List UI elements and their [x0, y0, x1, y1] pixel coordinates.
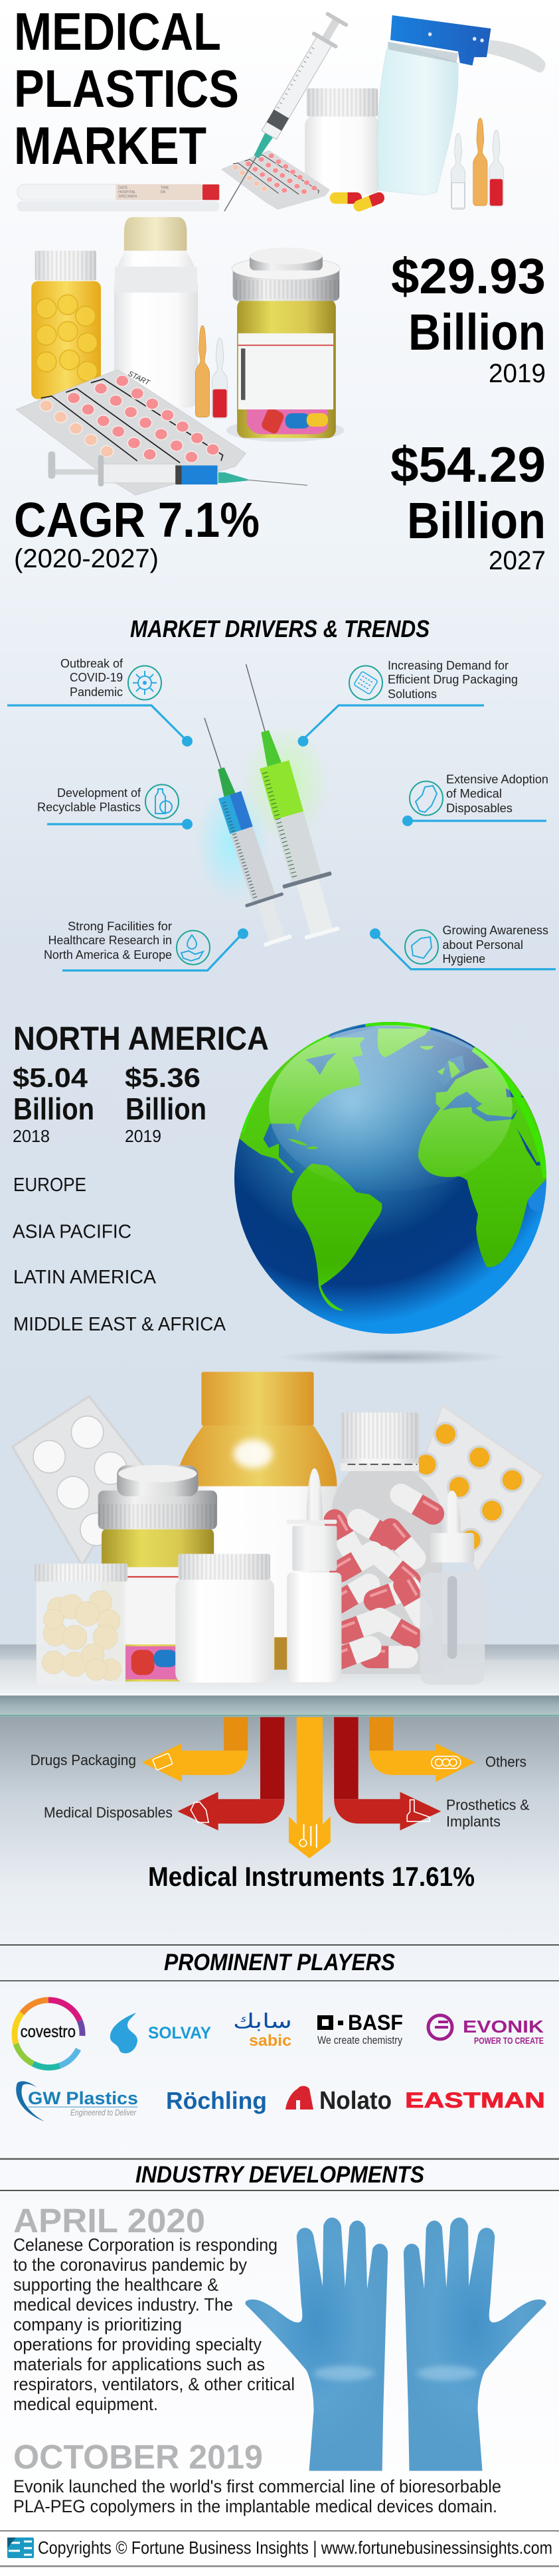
glass highlight [269, 1025, 513, 1191]
icon: pill jar with label [226, 248, 344, 442]
mediterranean sea [443, 1092, 518, 1121]
market size 2019: $29.93 [391, 248, 546, 304]
driver: COVID-19 [7, 657, 193, 747]
globe shadow [279, 1349, 505, 1365]
market size 2019 [391, 248, 546, 388]
icon: washing hands [412, 937, 432, 958]
icon: right pill blister [415, 1405, 544, 1573]
driver: drug packaging [297, 659, 518, 747]
icon: virus [133, 671, 157, 695]
icon: fortune business insights logo [7, 2538, 34, 2558]
icon: blue gloves [245, 2218, 546, 2471]
icon: clear jar with softgels [35, 1563, 127, 1685]
logo: nolato [285, 2086, 392, 2115]
market size 2027 [390, 437, 546, 575]
value 2018: $5.04 [13, 1062, 88, 1093]
shelf [0, 1644, 559, 1717]
rim seas [327, 1024, 376, 1038]
hudson bay [305, 1053, 337, 1075]
CAGR [14, 492, 260, 573]
value 2019: 2019 [125, 1126, 161, 1146]
icon: sample tube: HOSPITAL [118, 190, 135, 194]
text block: october 2019 [13, 2438, 501, 2516]
arrow: prosthetics [334, 1717, 441, 1830]
value 2018: Billion [13, 1092, 94, 1126]
driver: recyclable plastics [37, 784, 193, 829]
label: drugs packaging: Drugs Packaging [31, 1752, 136, 1768]
CAGR: (2020-2027) [14, 544, 159, 573]
icon: globe [232, 1022, 551, 1334]
red sea [517, 1128, 546, 1166]
label: prosthetics and implants: Prosthetics & [446, 1797, 530, 1813]
logo: basf [317, 2011, 403, 2046]
driver: drug packaging: Increasing Demand for [388, 659, 509, 672]
text block: april 2020: to the coronavirus pandemic by [13, 2255, 247, 2275]
north america [232, 1034, 365, 1173]
logo: sabic: sabic [249, 2032, 291, 2050]
label: others: Others [485, 1753, 526, 1770]
icon: sample tube: DATE [118, 186, 127, 190]
panel: company logos [15, 2000, 545, 2121]
rim highlight [241, 1035, 327, 1133]
icon: ampoules [195, 326, 227, 418]
driver: medical disposables: Disposables [446, 802, 513, 815]
logo: gw plastics: GW Plastics [28, 2088, 138, 2108]
heading: industry developments [0, 2158, 559, 2191]
arrow: others [369, 1717, 475, 1782]
label: prosthetics and implants [446, 1797, 530, 1830]
label: prosthetics and implants: Implants [446, 1813, 501, 1830]
logo: covestro: covestro [21, 2023, 76, 2041]
text block: april 2020: APRIL 2020 [13, 2202, 205, 2240]
heading: north america: NORTH AMERICA [13, 1020, 269, 1057]
logo: solvay [110, 2013, 211, 2053]
text block: april 2020: medical devices industry. The [13, 2295, 233, 2315]
other regions list: EUROPE [13, 1175, 86, 1196]
icon: recycled bottle [155, 789, 172, 814]
callout: medical instruments share: Medical Instruments 17.61% [148, 1861, 475, 1892]
icon: white bottle [175, 1554, 274, 1683]
heading: prominent players: PROMINENT PLAYERS [164, 1950, 395, 1975]
icon: yellow jar [98, 1465, 217, 1682]
logo: sabic: سابك [233, 2010, 292, 2033]
text block: april 2020: supporting the healthcare & [13, 2275, 218, 2295]
logo: evonik [428, 2015, 544, 2046]
heading: industry developments: INDUSTRY DEVELOPMENTS [135, 2162, 424, 2188]
icon: sample tube [17, 184, 219, 212]
icon: capsule bottle [320, 1413, 448, 1674]
icon: white tablet bottle [114, 217, 198, 407]
britain and scandinavia waters [443, 1055, 465, 1083]
text block: april 2020: company is prioritizing [13, 2315, 182, 2334]
driver: medical disposables [402, 772, 548, 826]
logo: eastman: EASTMAN [405, 2088, 545, 2112]
arrow: medical disposables [177, 1717, 285, 1830]
text block: april 2020: operations for providing specialty [13, 2334, 262, 2354]
other regions list [13, 1175, 226, 1335]
page background [0, 0, 559, 1719]
driver: COVID-19: COVID-19 [70, 671, 123, 684]
heading: market drivers: MARKET DRIVERS & TRENDS [130, 615, 430, 642]
logo: covestro [15, 2000, 82, 2068]
icon: horizontal syringe [48, 451, 307, 486]
icon: sample tube: DR [161, 190, 165, 194]
title [14, 2, 239, 175]
text block: october 2019: OCTOBER 2019 [13, 2438, 263, 2476]
icon: gloves [416, 786, 437, 812]
driver: healthcare research: Healthcare Research in [48, 934, 172, 947]
illustration: pharma bottles and blister pack [16, 217, 344, 495]
market size 2027: $54.29 [390, 437, 546, 492]
driver: healthcare research: North America & Europe [44, 948, 172, 962]
logo: sabic [233, 2010, 292, 2050]
icon: top syringe [212, 11, 351, 218]
icon: hand with drop [181, 935, 203, 961]
text block: october 2019: PLA-PEG copolymers in the implantable medical devices domain. [13, 2496, 497, 2516]
footer [0, 2530, 559, 2567]
driver: COVID-19: Pandemic [70, 685, 123, 699]
logo: solvay: SOLVAY [148, 2024, 211, 2042]
illustration: two syringes [186, 658, 347, 949]
driver: personal hygiene: Growing Awareness [442, 924, 548, 937]
icon: nasal spray [286, 1468, 341, 1682]
icon: dropper bottle [420, 1490, 485, 1685]
value 2018 [13, 1062, 94, 1146]
chart: application arrows [142, 1717, 475, 1859]
logo: gw plastics [16, 2081, 138, 2121]
CAGR: CAGR 7.1% [14, 492, 260, 547]
logo: rochling: Röchling [166, 2087, 267, 2114]
text block: april 2020: medical equipment. [13, 2394, 158, 2414]
driver: healthcare research: Strong Facilities for [68, 920, 172, 933]
other regions list: LATIN AMERICA [13, 1267, 157, 1288]
illustration: header medical supplies [17, 15, 546, 213]
market size 2027: Billion [407, 492, 546, 549]
logo: evonik: EVONIK [463, 2017, 544, 2037]
logo: gw plastics: Engineered to Deliver [70, 2108, 137, 2117]
value 2019: $5.36 [125, 1062, 200, 1093]
market size 2027: 2027 [489, 546, 546, 575]
title: MEDICAL [14, 2, 221, 61]
illustration: shelf with medicine containers [0, 1372, 559, 1717]
iceland [420, 1046, 434, 1050]
driver: drug packaging: Efficient Drug Packaging [388, 673, 518, 686]
label: medical disposables: Medical Disposables [44, 1804, 173, 1821]
title: PLASTICS [14, 59, 239, 118]
icon: green syringe [222, 658, 347, 942]
icon: blue syringe [186, 712, 297, 949]
icon: blister [354, 671, 378, 695]
logo: nolato: Nolato [319, 2087, 392, 2115]
value 2019 [125, 1062, 206, 1146]
panel: regional data [13, 1020, 269, 1335]
south america [292, 1163, 382, 1311]
icon: face shield [378, 15, 546, 195]
logo: basf: BASF [348, 2011, 403, 2035]
east africa ocean [528, 1179, 546, 1213]
other regions list: MIDDLE EAST & AFRICA [13, 1314, 226, 1335]
value 2019: Billion [125, 1092, 206, 1126]
text block: october 2019: Evonik launched the world's first commercial line of bioresorbable [13, 2476, 501, 2496]
icon: left tablet blister [13, 1396, 143, 1565]
icon: large blister pack [16, 370, 246, 495]
icon: white bottle [305, 88, 380, 194]
arrow: medical instruments [289, 1717, 331, 1859]
driver: recyclable plastics: Development of [57, 786, 141, 800]
market size 2019: 2019 [489, 359, 546, 388]
icon: yellow softgel bottle [31, 251, 101, 399]
logo: basf: We create chemistry [317, 2034, 402, 2046]
icon: small blister pack [221, 151, 330, 210]
driver: recyclable plastics: Recyclable Plastics [37, 801, 141, 814]
driver: personal hygiene: Hygiene [442, 952, 485, 966]
icon: ampoules [451, 118, 503, 210]
eurasia and africa [418, 1047, 549, 1267]
driver: drug packaging: Solutions [388, 687, 437, 701]
text block: april 2020 [13, 2202, 295, 2414]
icon: capsules [330, 190, 386, 213]
text block: april 2020: respirators, ventilators, & other critical [13, 2374, 295, 2394]
driver: personal hygiene [370, 924, 556, 969]
text block: april 2020: Celanese Corporation is responding [13, 2235, 278, 2255]
title: MARKET [14, 116, 206, 175]
greenland [378, 1029, 430, 1057]
other regions list: ASIA PACIFIC [13, 1221, 131, 1242]
text block: april 2020: materials for applications such as [13, 2354, 265, 2374]
caribbean islands [287, 1139, 318, 1149]
driver: medical disposables: Extensive Adoption [446, 772, 548, 786]
arrow: drugs packaging [142, 1717, 248, 1782]
icon: sample tube: SPECIMEN [118, 194, 137, 198]
value 2018: 2018 [13, 1126, 50, 1146]
icon: sample tube: TIME [161, 186, 169, 190]
driver: COVID-19: Outbreak of [60, 657, 123, 670]
driver: healthcare research [44, 920, 248, 970]
icon: orange bottle [180, 1372, 337, 1670]
driver: medical disposables: of Medical [446, 787, 502, 800]
driver: personal hygiene: about Personal [442, 938, 523, 952]
icon: START label on blister: START [127, 370, 151, 388]
